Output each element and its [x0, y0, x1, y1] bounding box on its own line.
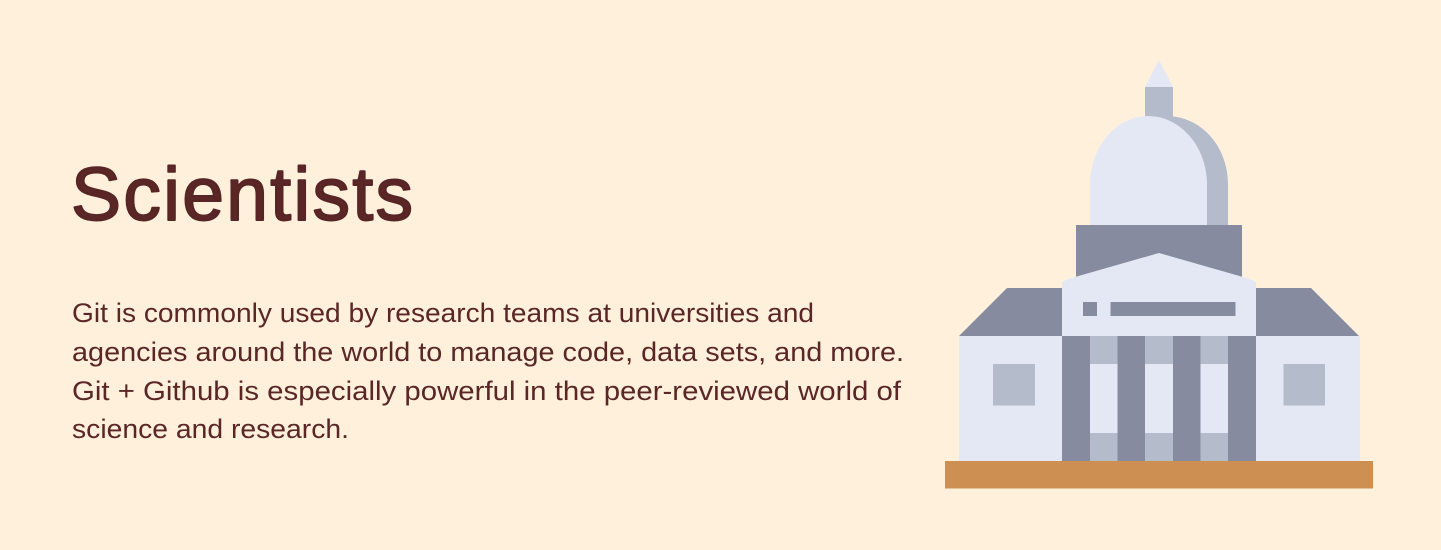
body text: agencies around the world to manage code, data sets, and more. [72, 337, 904, 367]
small plaque [1083, 302, 1097, 316]
right window [1284, 364, 1325, 406]
portico interior [1090, 336, 1228, 461]
base [945, 461, 1373, 488]
columns [1062, 336, 1256, 461]
icon: university building [945, 60, 1373, 488]
body text: science and research. [72, 414, 349, 444]
right wing roof [1256, 288, 1359, 336]
spire tip [1145, 60, 1173, 87]
portico light bays [1090, 364, 1228, 433]
spire tower [1145, 87, 1173, 119]
left window [993, 364, 1035, 406]
pediment [1062, 253, 1256, 336]
body text [72, 298, 904, 444]
dome shadow [1159, 116, 1228, 225]
title: Scientists [71, 152, 413, 236]
inscription plaque [1110, 302, 1236, 316]
left wing [959, 336, 1062, 461]
right wing [1256, 336, 1360, 461]
dome [1090, 116, 1207, 225]
body text: Git + Github is especially powerful in the peer-reviewed world of [72, 376, 902, 406]
body text: Git is commonly used by research teams at universities and [72, 298, 814, 328]
drum [1076, 225, 1242, 281]
left wing roof [959, 288, 1062, 336]
